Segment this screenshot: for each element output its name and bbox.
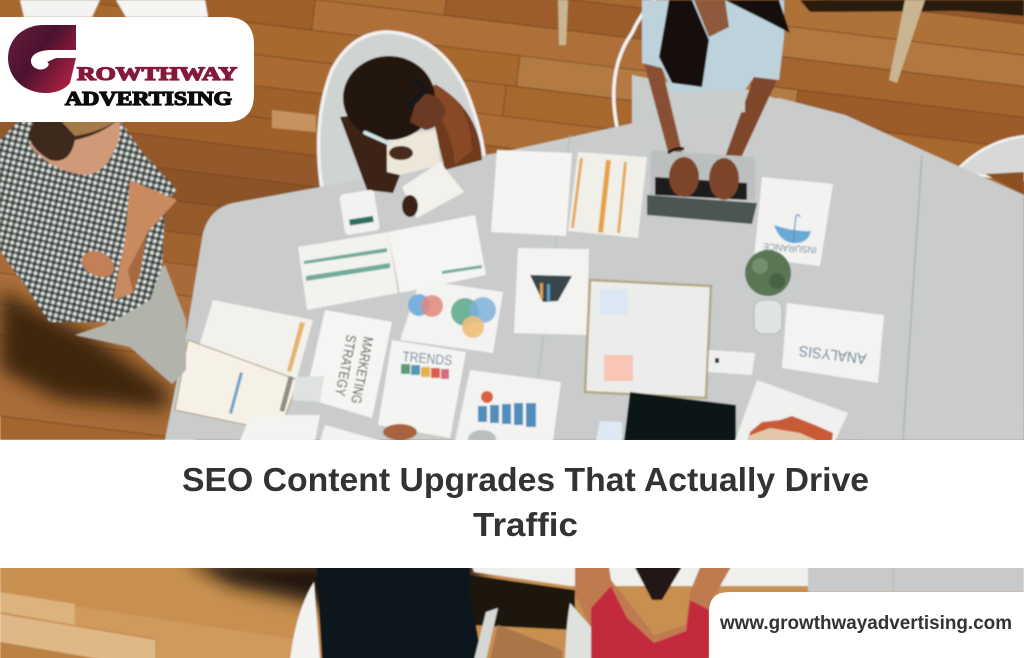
- shadow on the floor: [185, 560, 480, 612]
- paper: analysis: ANALYSIS: [798, 342, 867, 367]
- photo strip: bottom of the table scene: [0, 560, 1024, 658]
- paper: bar chart sheet: [514, 248, 589, 335]
- table edge: [471, 568, 1024, 592]
- paper: venn diagrams: [400, 280, 503, 353]
- website badge: [709, 592, 1024, 658]
- paper: insurance: INSURANCE: [763, 240, 817, 255]
- paper: trends: [378, 340, 466, 438]
- photo: team around a table seen from above: [0, 0, 1024, 440]
- paper: blue bars: [455, 370, 561, 448]
- paper: document stack: [195, 300, 313, 385]
- laptop: [647, 148, 757, 224]
- paper: analysis: [782, 303, 884, 383]
- table: [165, 98, 1024, 440]
- plant and water glass: [745, 250, 791, 334]
- tablet: [624, 392, 736, 441]
- chair and table legs at the top: [20, 0, 925, 83]
- logo wordmark: advertising: ADVERTISING: [65, 88, 233, 110]
- paper: green table right: [388, 215, 486, 293]
- person: woman in red top: [565, 560, 735, 658]
- floor gap: [490, 625, 562, 658]
- paper: orange table: [568, 152, 647, 238]
- chair: behind curly-haired woman: [319, 32, 484, 190]
- website url: www.growthwayadvertising.com: [719, 613, 1012, 634]
- title line two: Traffic: [473, 506, 578, 543]
- chair: far right: [955, 136, 1024, 195]
- paper: marketing strategy: MARKETING: [348, 335, 377, 405]
- whiteboard with sticky notes: [585, 280, 711, 398]
- notebook: [402, 162, 464, 218]
- paper: green table left: [298, 232, 398, 310]
- person: woman at laptop: [642, 0, 790, 160]
- title panel: [0, 440, 1024, 568]
- chair: behind laptop woman: [614, 0, 780, 127]
- paper: blank sheet: [491, 150, 572, 236]
- small card: [292, 376, 324, 402]
- logo badge: [0, 17, 254, 122]
- person: seated in dark clothing with chair: [290, 560, 498, 658]
- person: woman with curly hair: [340, 56, 482, 193]
- paper: marketing strategy: STRATEGY: [332, 333, 360, 398]
- paper: area chart: [735, 380, 848, 441]
- paper: bottom sheets: [240, 415, 622, 441]
- wooden floor: [0, 0, 1024, 440]
- hand at the table edge: [383, 424, 417, 440]
- paper: trends: TRENDS: [402, 348, 453, 368]
- wood floor: [0, 560, 1024, 658]
- title line one: SEO Content Upgrades That Actually Drive: [182, 461, 869, 498]
- clipboard: [175, 340, 298, 432]
- paper: marketing strategy: [305, 310, 392, 418]
- logo wordmark: growthway: ROWTHWAY: [77, 64, 237, 85]
- calculator: [339, 189, 380, 235]
- paper: insurance: [754, 177, 833, 266]
- logo mark: G: [8, 25, 76, 93]
- person: man in checkered shirt: [0, 120, 186, 384]
- white card: [708, 350, 755, 375]
